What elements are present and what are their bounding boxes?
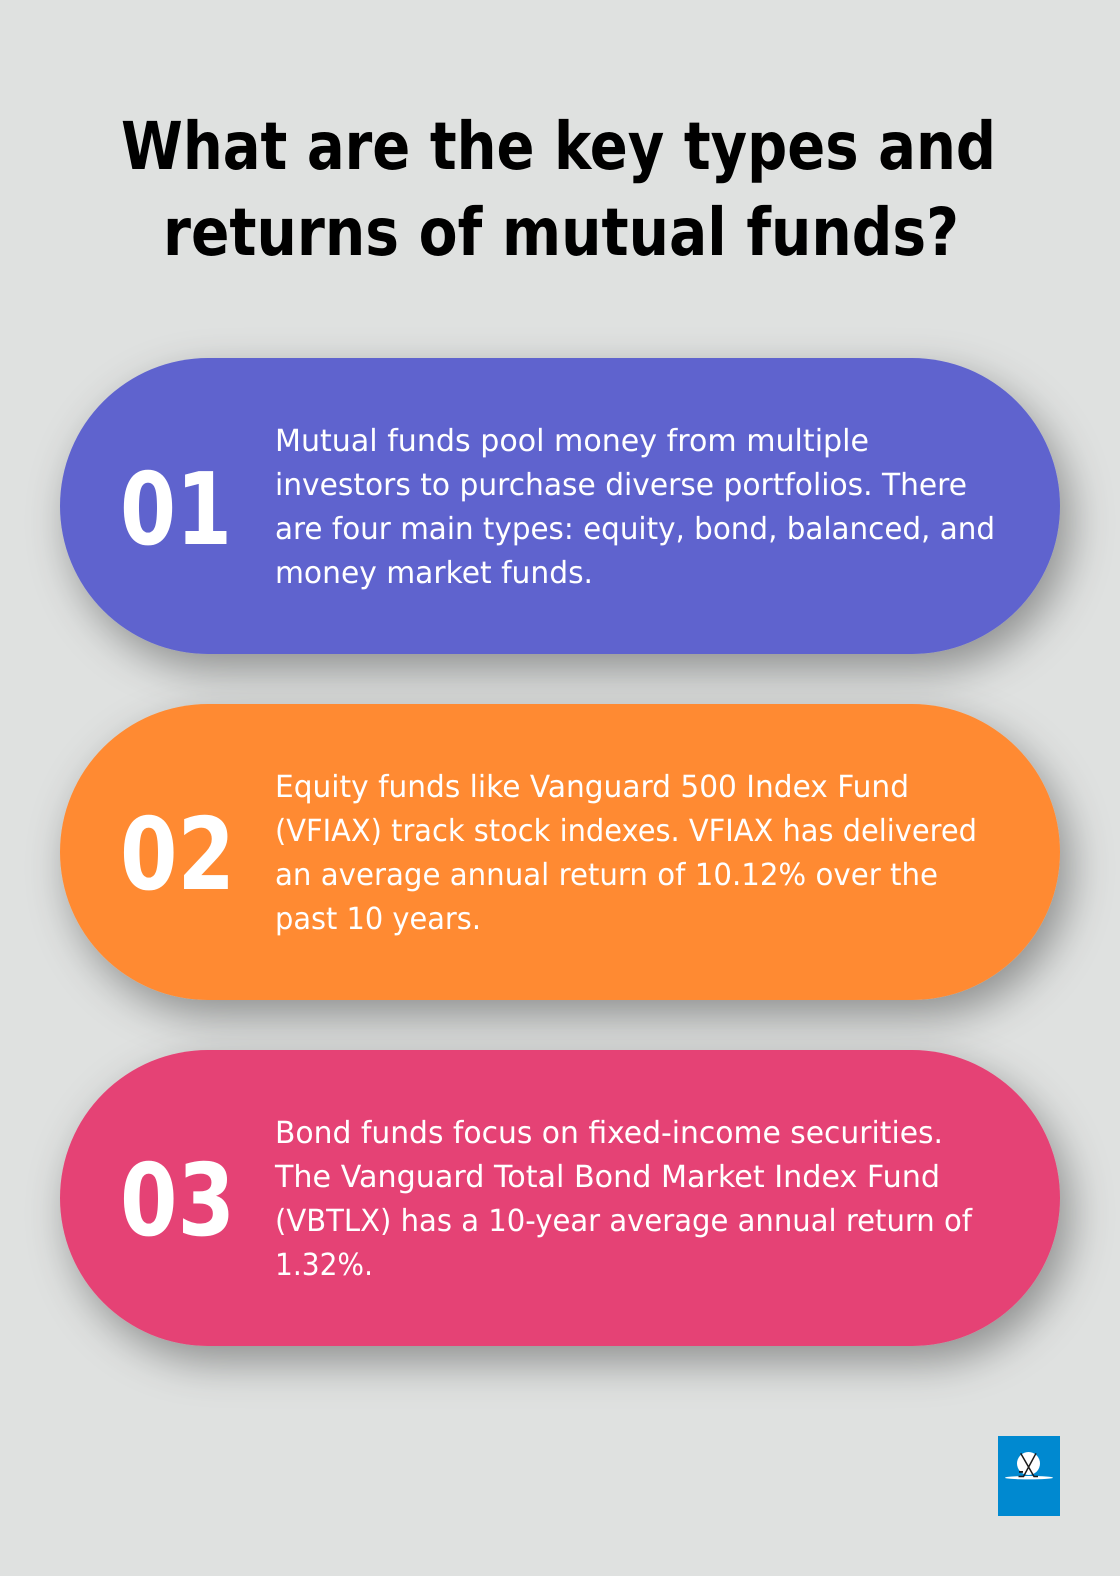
text block 02	[275, 770, 977, 937]
text block 03: 1.32%.	[275, 1248, 373, 1283]
text block 01	[275, 424, 995, 591]
number 02: 02	[120, 796, 235, 913]
pill background 03	[60, 1050, 1060, 1346]
panel: step 02	[60, 704, 1060, 1000]
title	[121, 108, 996, 271]
number 01: 01	[120, 451, 232, 568]
title: returns of mutual funds?	[163, 194, 959, 271]
text block 01: Mutual funds pool money from multiple	[275, 424, 869, 459]
text block 03: The Vanguard Total Bond Market Index Fund	[274, 1160, 940, 1195]
pill background 02	[60, 704, 1060, 1000]
text block 02: Equity funds like Vanguard 500 Index Fund	[275, 770, 909, 805]
number 03: 03	[120, 1142, 235, 1259]
panel: step 03	[60, 1050, 1060, 1346]
text block 01: are four main types: equity, bond, balanced, and	[275, 512, 995, 547]
text block 03	[274, 1116, 973, 1283]
pill background 01	[60, 358, 1060, 654]
icon: hockey sticks logo	[998, 1436, 1060, 1516]
text block 02: (VFIAX) track stock indexes. VFIAX has delivered	[275, 814, 977, 849]
panel: step 01	[60, 358, 1060, 654]
text block 02: an average annual return of 10.12% over the	[275, 858, 938, 893]
text block 02: past 10 years.	[275, 902, 481, 937]
text block 01: money market funds.	[275, 556, 593, 591]
text block 01: investors to purchase diverse portfolios. There	[275, 468, 967, 503]
text block 03: Bond funds focus on fixed-income securities.	[275, 1116, 943, 1151]
text block 03: (VBTLX) has a 10-year average annual return of	[275, 1204, 973, 1239]
